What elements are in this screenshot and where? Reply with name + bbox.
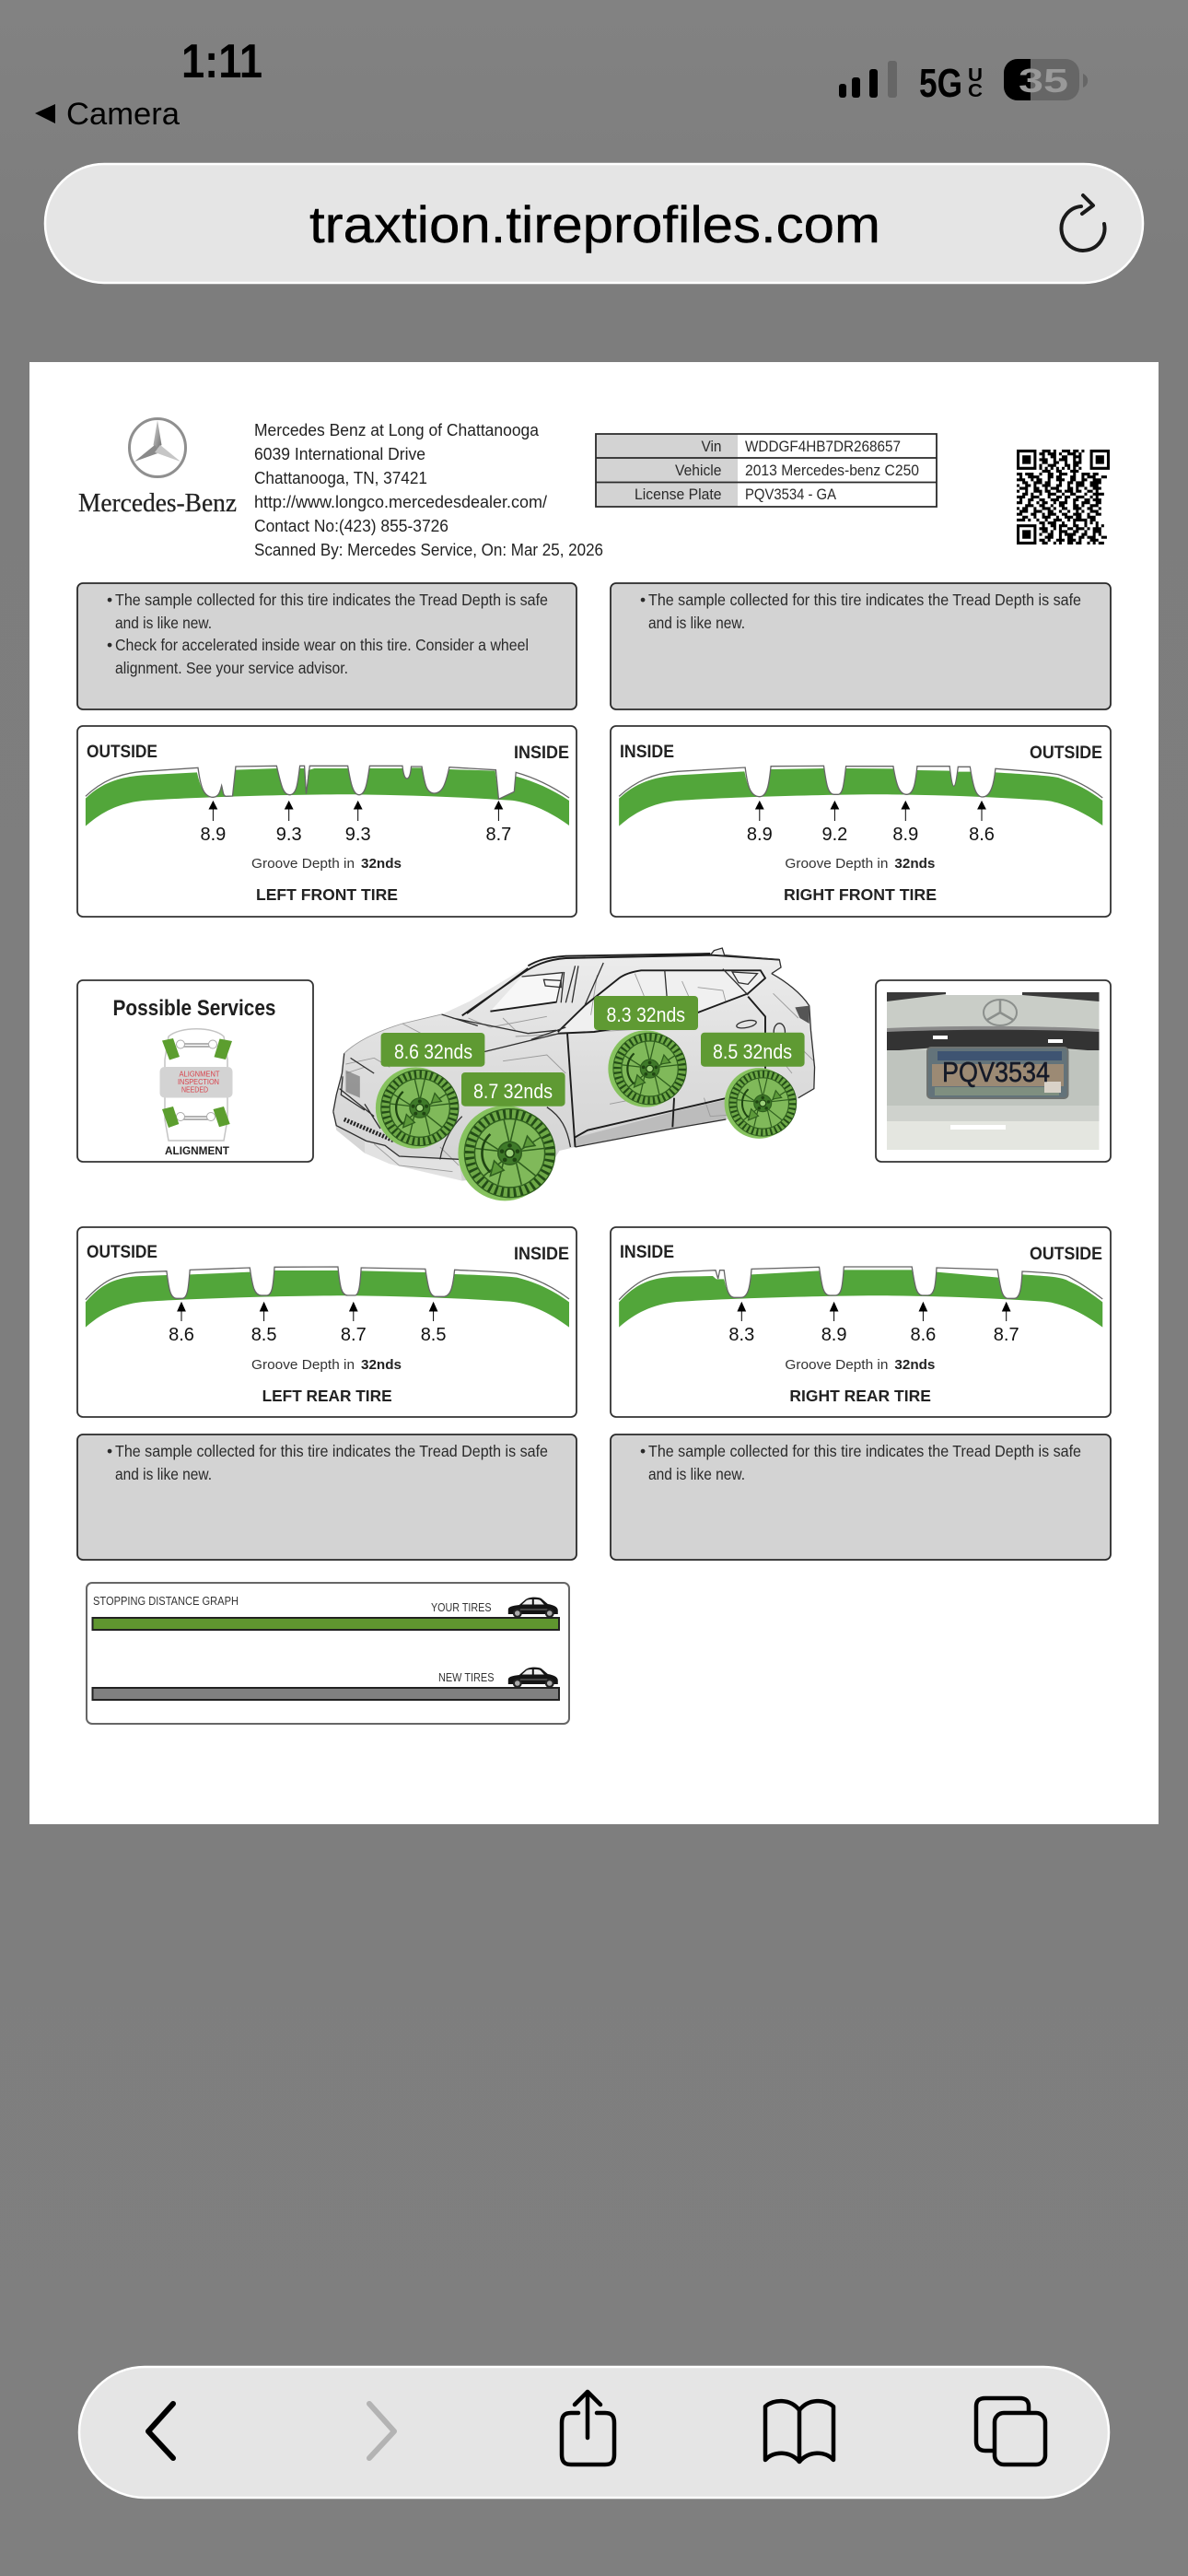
reading: right front: 8.7 32nds (473, 1080, 553, 1103)
icon: bookmarks (765, 2401, 833, 2462)
notice: left front tire: • (107, 591, 112, 609)
icon: alignment car diagram (160, 1029, 232, 1141)
panel: right front tire: 32nds (894, 856, 935, 872)
panel: right rear tire: RIGHT REAR TIRE (789, 1387, 931, 1405)
notice: left front tire: • (107, 636, 112, 654)
panel: right front tire: Groove Depth in (785, 856, 888, 872)
vehicle table: PQV3534 - GA (745, 486, 836, 503)
icon: tabs (976, 2398, 1045, 2465)
notice: right front tire: The sample collected for this tire indicates the Tread Depth is safe (648, 591, 1081, 609)
car with tire readings (333, 948, 815, 1200)
panel: license plate photo (876, 980, 1111, 1162)
panel: left front tire: 8.7 (485, 825, 511, 845)
panel: right rear tire: 32nds (894, 1357, 935, 1373)
panel: left front tire: INSIDE (514, 743, 569, 763)
panel: right rear tire (611, 1227, 1111, 1417)
panel: right front tire (611, 726, 1111, 917)
network type: 5G (919, 61, 962, 106)
notice: left front tire: The sample collected for this tire indicates the Tread Depth is safe (115, 591, 548, 609)
dealer details (254, 421, 603, 559)
icon: forward (369, 2404, 394, 2458)
notice: left rear tire: The sample collected for this tire indicates the Tread Depth is safe (115, 1442, 548, 1460)
panel: left front tire: 9.3 (276, 825, 302, 845)
panel: right rear tire: OUTSIDE (1030, 1244, 1102, 1264)
notice: right rear tire (611, 1434, 1111, 1560)
tread profile (86, 1267, 569, 1328)
network type: U (968, 65, 983, 86)
panel: right front tire: 8.9 (892, 825, 918, 845)
vehicle table: Vehicle (675, 463, 722, 479)
panel: right front tire: INSIDE (620, 742, 674, 762)
notice: left rear tire: and is like new. (115, 1465, 212, 1483)
panel: stopping distance graph: STOPPING DISTANCE GRAPH (93, 1594, 239, 1608)
panel: right front tire: 8.9 (747, 825, 773, 845)
wheel: front far (376, 1067, 459, 1149)
bar: new tires (92, 1668, 559, 1700)
panel: left front tire (77, 726, 577, 917)
wheel: rear near (725, 1068, 797, 1139)
panel: possible services (77, 980, 313, 1162)
panel: left rear tire (77, 1227, 577, 1417)
bar: your tires (92, 1598, 559, 1630)
panel: stopping distance graph (87, 1583, 569, 1724)
car body and wheels (333, 948, 815, 1200)
clock: 1:11 (181, 35, 262, 88)
panel: left rear tire: 8.7 (341, 1325, 367, 1345)
panel: left front tire: 8.9 (200, 825, 226, 845)
notice: left front tire: alignment. See your service advisor. (115, 659, 348, 677)
tread profile (86, 766, 569, 826)
bar: your tires: YOUR TIRES (431, 1600, 492, 1614)
back to Camera link: Camera (66, 97, 180, 132)
logo: Mercedes-Benz: Mercedes-Benz (78, 488, 237, 518)
panel: right rear tire: 8.7 (994, 1325, 1019, 1345)
icon: alignment car diagram: ALIGNMENT (179, 1070, 219, 1079)
reading: right rear: 8.3 32nds (606, 1003, 685, 1026)
dealer details: Scanned By: Mercedes Service, On: Mar 25, 2026 (254, 541, 603, 559)
panel: left front tire: 9.3 (345, 825, 371, 845)
notice: right front tire: • (640, 591, 646, 609)
icon: alignment car diagram: NEEDED (181, 1085, 208, 1095)
notice: right front tire: and is like new. (648, 614, 745, 632)
icon: battery 35 percent (1004, 59, 1088, 100)
tread profile (619, 1267, 1102, 1328)
network type: C (968, 81, 983, 101)
panel: left front tire: Groove Depth in (251, 856, 355, 872)
panel: left rear tire: 32nds (361, 1357, 402, 1373)
icon: battery 35 percent: 35 (1019, 62, 1068, 100)
panel: right rear tire: INSIDE (620, 1242, 674, 1262)
groove arrows (178, 1303, 437, 1321)
panel: left rear tire: 8.5 (421, 1325, 447, 1345)
panel: left rear tire: 8.6 (169, 1325, 194, 1345)
groove arrows (756, 802, 985, 821)
vehicle table (596, 434, 937, 507)
panel: left rear tire: Groove Depth in (251, 1357, 355, 1373)
reading: left rear: 8.5 32nds (713, 1040, 792, 1063)
reading: right rear (594, 996, 698, 1030)
panel: left front tire: OUTSIDE (87, 742, 157, 762)
dealer details: http://www.longco.mercedesdealer.com/ (254, 493, 547, 511)
dealer details: Mercedes Benz at Long of Chattanooga (254, 421, 540, 439)
notice: right rear tire: and is like new. (648, 1465, 745, 1483)
wheel: front near (458, 1106, 555, 1200)
groove arrows (209, 802, 503, 821)
notice: left front tire (77, 583, 577, 709)
icon: back (148, 2404, 173, 2458)
panel: right front tire: OUTSIDE (1030, 743, 1102, 763)
panel: left rear tire: LEFT REAR TIRE (262, 1387, 392, 1405)
tread profile (619, 766, 1102, 826)
notice: right front tire (611, 583, 1111, 709)
bar: new tires: NEW TIRES (438, 1670, 495, 1684)
panel: left front tire: LEFT FRONT TIRE (256, 885, 398, 904)
notice: left front tire: and is like new. (115, 614, 212, 632)
panel: license plate photo: PQV3534 (942, 1056, 1050, 1088)
report page (29, 362, 1159, 1824)
panel: right front tire: 9.2 (821, 825, 847, 845)
browser toolbar (79, 2367, 1109, 2498)
panel: right front tire: RIGHT FRONT TIRE (784, 885, 937, 904)
icon: signal bars (839, 61, 897, 98)
panel: left rear tire: 8.5 (251, 1325, 277, 1345)
logo: Mercedes-Benz (78, 418, 237, 518)
vehicle table: WDDGF4HB7DR268657 (745, 439, 901, 455)
panel: right rear tire: Groove Depth in (785, 1357, 888, 1373)
vehicle table: License Plate (635, 486, 722, 503)
icon: alignment car diagram: INSPECTION (178, 1077, 219, 1086)
vehicle table: 2013 Mercedes-benz C250 (745, 463, 919, 479)
qr code (1017, 450, 1110, 544)
reading: right front (461, 1072, 565, 1107)
icon: reload (1061, 195, 1104, 251)
groove arrows (738, 1303, 1010, 1321)
panel: right rear tire: 8.3 (728, 1325, 754, 1345)
address bar (45, 164, 1143, 283)
wheel: rear far (608, 1030, 687, 1107)
panel: left rear tire: INSIDE (514, 1244, 569, 1264)
dealer details: 6039 International Drive (254, 445, 425, 463)
icon: share (562, 2392, 614, 2465)
notice: right rear tire: • (640, 1442, 646, 1460)
panel: right rear tire: 8.9 (821, 1325, 847, 1345)
panel: left front tire: 32nds (361, 856, 402, 872)
notice: left front tire: Check for accelerated inside wear on this tire. Consider a wheel (115, 636, 529, 654)
reading: left front (381, 1033, 484, 1067)
panel: left rear tire: OUTSIDE (87, 1242, 157, 1262)
status bar (35, 35, 1088, 132)
dealer details: Chattanooga, TN, 37421 (254, 469, 427, 487)
notice: left rear tire: • (107, 1442, 112, 1460)
reading: left rear (701, 1033, 805, 1067)
panel: right rear tire: 8.6 (910, 1325, 936, 1345)
dealer details: Contact No:(423) 855-3726 (254, 517, 448, 535)
notice: right rear tire: The sample collected for this tire indicates the Tread Depth is safe (648, 1442, 1081, 1460)
url: traxtion.tireprofiles.com (309, 195, 880, 253)
reading: left front: 8.6 32nds (394, 1040, 472, 1063)
notice: left rear tire (77, 1434, 577, 1560)
panel: right front tire: 8.6 (969, 825, 995, 845)
vehicle table: Vin (702, 439, 722, 455)
panel: possible services: ALIGNMENT (165, 1146, 229, 1157)
panel: possible services: Possible Services (112, 996, 276, 1021)
